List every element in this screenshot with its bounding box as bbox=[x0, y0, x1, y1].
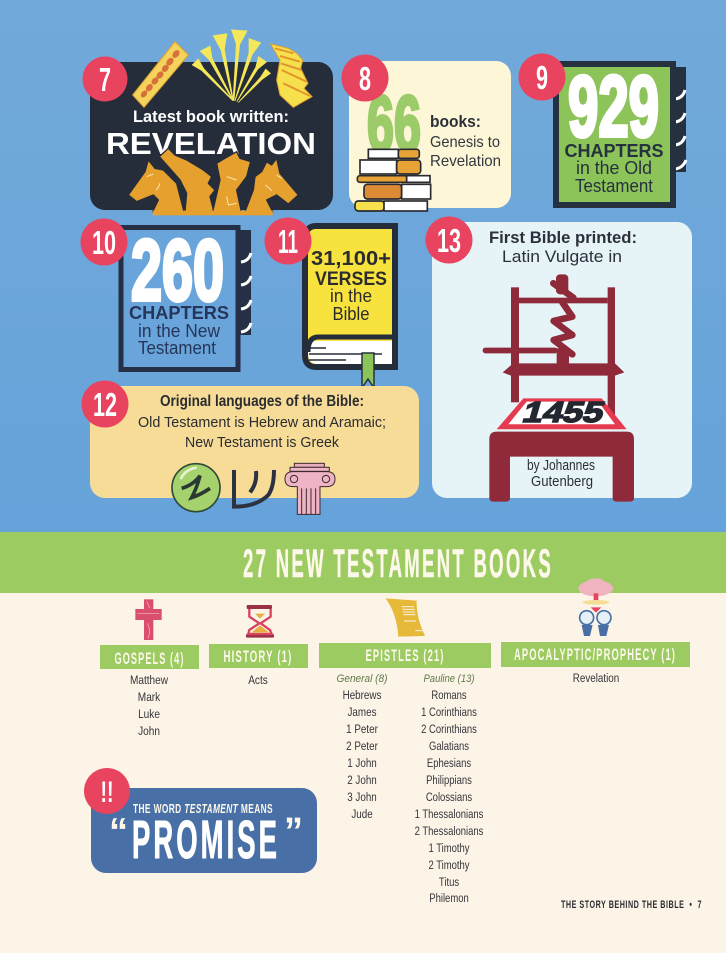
text: 31,100+ verses in the Bible: Bible bbox=[332, 304, 370, 324]
badge 9 bbox=[518, 54, 566, 100]
number 260: 260 bbox=[131, 223, 224, 319]
badge exclamation: !! bbox=[100, 776, 114, 809]
panel 7: latest book written bbox=[82, 29, 333, 215]
closing quotation mark: ” bbox=[284, 811, 303, 853]
text: chapters in the Old Testament: in the Old bbox=[576, 158, 652, 178]
book list: John bbox=[138, 725, 160, 738]
Pauline list: 1 Corinthians bbox=[421, 706, 477, 719]
badge 13: 13 bbox=[437, 222, 461, 259]
heading: first Bible printed: First Bible printed: bbox=[489, 228, 637, 247]
text: chapters in the New Testament bbox=[129, 303, 229, 358]
Pauline list: Colossians bbox=[426, 791, 473, 804]
subheading: Pauline: Pauline (13) bbox=[424, 673, 475, 685]
panel 9: 929 chapters bbox=[518, 54, 686, 205]
text: Genesis to Revelation: Genesis to bbox=[430, 134, 500, 151]
icon: seven trumpets bbox=[192, 29, 271, 103]
General list: 3 John bbox=[347, 791, 377, 804]
badge 7 bbox=[82, 56, 128, 102]
Pauline list: Titus bbox=[439, 876, 460, 889]
icon: printing press bbox=[483, 274, 634, 502]
badge 8: 8 bbox=[359, 60, 371, 97]
book list bbox=[130, 674, 169, 738]
text: chapters in the Old Testament: Testament bbox=[575, 176, 653, 196]
icon: Greek column bbox=[285, 463, 335, 514]
book list: Acts bbox=[248, 674, 268, 687]
number 929: 929 bbox=[568, 59, 659, 155]
General list: Jude bbox=[351, 808, 373, 821]
Pauline list: Philippians bbox=[426, 774, 472, 787]
text: 31,100+ verses in the Bible bbox=[311, 248, 391, 324]
icon: stack of books bbox=[355, 149, 431, 211]
badge 9: 9 bbox=[536, 59, 548, 96]
header bar bbox=[319, 643, 491, 668]
Pauline list: Galatians bbox=[429, 740, 470, 753]
text: by Johannes Gutenberg bbox=[527, 458, 595, 490]
text: Genesis to Revelation: Revelation bbox=[430, 153, 501, 170]
Pauline list: 1 Thessalonians bbox=[415, 808, 484, 821]
section banner bbox=[0, 532, 726, 593]
icon: Hebrew letter bbox=[234, 470, 274, 507]
binder tabs bbox=[670, 67, 686, 172]
badge 11 bbox=[264, 218, 312, 264]
Pauline list: 2 Thessalonians bbox=[415, 825, 484, 838]
icon: book bbox=[305, 226, 395, 367]
badge 8 bbox=[342, 54, 388, 102]
Pauline list: 2 Timothy bbox=[428, 859, 470, 872]
icon: hourglass bbox=[246, 605, 274, 638]
header bar bbox=[209, 644, 308, 668]
icon: scroll bbox=[133, 42, 188, 107]
badge 13 bbox=[426, 216, 472, 264]
book list: Mark bbox=[138, 691, 161, 704]
Pauline list: Philemon bbox=[429, 892, 469, 905]
text: books: books: bbox=[430, 112, 481, 131]
subheading: General: General (8) bbox=[336, 673, 388, 685]
text: Latin Vulgate in: Latin Vulgate in bbox=[502, 247, 622, 266]
General list bbox=[343, 689, 382, 821]
General list: Hebrews bbox=[343, 689, 382, 702]
callout: testament means promise bbox=[84, 768, 317, 873]
book list: Revelation bbox=[573, 672, 619, 685]
text: chapters in the Old Testament: CHAPTERS bbox=[564, 141, 664, 161]
callout lead-in: THE WORD TESTAMENT MEANS bbox=[133, 801, 273, 816]
badge 10 bbox=[80, 218, 128, 266]
badge 12 bbox=[82, 380, 128, 428]
General list: 1 John bbox=[347, 757, 377, 770]
icon: yellow letter bbox=[386, 598, 425, 637]
Pauline list: 2 Corinthians bbox=[421, 723, 477, 736]
number 66: 66 bbox=[367, 79, 421, 168]
cream background bbox=[0, 592, 726, 953]
Pauline list bbox=[415, 689, 484, 905]
badge exclamation bbox=[84, 768, 130, 814]
book list: Luke bbox=[138, 708, 160, 721]
header bar bbox=[501, 642, 690, 667]
General list: 2 Peter bbox=[346, 740, 378, 753]
text: chapters in the New Testament: in the New bbox=[138, 321, 221, 341]
text: by Johannes Gutenberg: by Johannes bbox=[527, 458, 595, 474]
badge 7: 7 bbox=[99, 61, 111, 98]
blue background bbox=[0, 0, 726, 533]
General list: 2 John bbox=[347, 774, 377, 787]
column: Apocalyptic / Prophecy bbox=[501, 578, 690, 685]
book list: Matthew bbox=[130, 674, 169, 687]
text: language description: New Testament is Greek bbox=[185, 434, 339, 451]
heading: Revelation: REVELATION bbox=[106, 126, 316, 161]
icon: mushroom cloud and binoculars bbox=[578, 578, 613, 636]
icon: green globe bbox=[172, 464, 220, 512]
header label: EPISTLES (21) bbox=[366, 646, 444, 665]
badge 11: 11 bbox=[278, 223, 298, 260]
callout word: PROMISE bbox=[132, 810, 280, 870]
panel 10: 260 chapters bbox=[80, 218, 251, 370]
text: language description: Old Testament is Hebrew and Aramaic; bbox=[138, 414, 386, 431]
icon: cross bbox=[135, 599, 162, 640]
panel 13: first Bible printed bbox=[426, 216, 692, 502]
Pauline list: Romans bbox=[431, 689, 467, 702]
panel 8: 66 books bbox=[342, 54, 511, 211]
text: Genesis to Revelation bbox=[430, 134, 501, 170]
General list: 1 Peter bbox=[346, 723, 378, 736]
column: Gospels bbox=[100, 599, 199, 738]
General list: James bbox=[348, 706, 377, 719]
badge 12: 12 bbox=[93, 386, 117, 423]
panel 11: verses bbox=[264, 218, 395, 388]
column: History bbox=[209, 605, 308, 687]
text: 31,100+ verses in the Bible: in the bbox=[330, 286, 372, 306]
text: language description bbox=[138, 414, 386, 451]
binder tabs bbox=[236, 230, 251, 335]
text: year 1455: 1455 bbox=[519, 397, 608, 429]
badge 10: 10 bbox=[92, 224, 116, 261]
book cover bbox=[121, 228, 238, 370]
text: chapters in the New Testament: CHAPTERS bbox=[129, 303, 229, 323]
header label: HISTORY (1) bbox=[224, 647, 292, 666]
text: 31,100+ verses in the Bible: 31,100+ bbox=[311, 248, 391, 270]
icon: curled scroll bbox=[271, 44, 312, 107]
text: chapters in the Old Testament bbox=[564, 141, 664, 196]
Pauline list: 1 Timothy bbox=[428, 842, 470, 855]
column: Epistles bbox=[319, 598, 491, 905]
text: chapters in the New Testament: Testament bbox=[138, 338, 216, 358]
text: 31,100+ verses in the Bible: VERSES bbox=[315, 269, 387, 290]
opening quotation mark: “ bbox=[109, 811, 128, 853]
icon: bookmark bbox=[362, 353, 374, 388]
heading: original languages: Original languages of the Bible: bbox=[160, 393, 364, 410]
Pauline list: Ephesians bbox=[427, 757, 472, 770]
icon: four horses bbox=[128, 148, 298, 215]
book cover bbox=[556, 64, 673, 205]
text: by Johannes Gutenberg: Gutenberg bbox=[531, 474, 593, 490]
header bar bbox=[100, 645, 199, 669]
header label: GOSPELS (4) bbox=[114, 649, 184, 668]
heading: latest book written: Latest book written: bbox=[133, 107, 289, 126]
panel 12: original languages bbox=[82, 380, 419, 514]
